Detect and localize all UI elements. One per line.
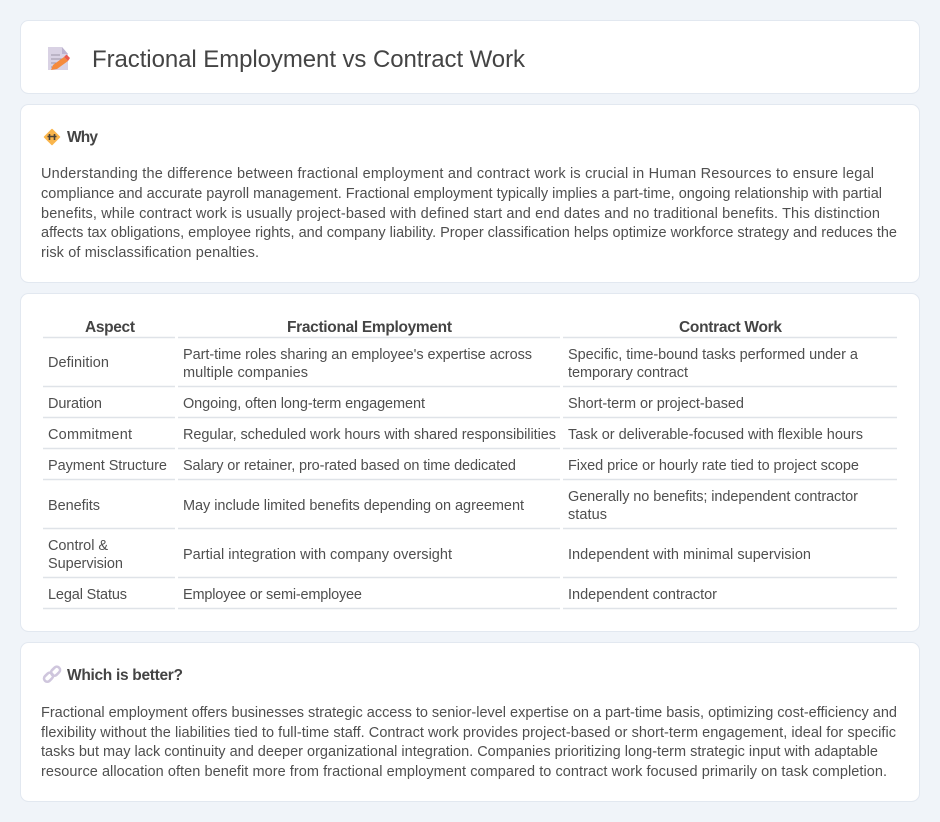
panel: header xyxy=(20,20,920,94)
title: Fractional Employment vs Contract Work xyxy=(92,46,526,73)
row: control and supervision xyxy=(43,538,897,578)
icon: document with pencil xyxy=(48,47,70,70)
table header row: Fractional Employment xyxy=(287,319,452,336)
table header row: Aspect xyxy=(85,319,135,336)
text block: why paragraph: affects tax obligations, employee rights, and company liability. Proper classification helps optimize workforce strategy and reduces the xyxy=(41,225,897,241)
row: definition: multiple companies xyxy=(183,365,308,381)
panel: comparison table xyxy=(20,294,920,632)
row: definition xyxy=(43,347,897,386)
row: benefits: May include limited benefits depending on agreement xyxy=(183,498,524,514)
row: payment structure: Payment Structure xyxy=(48,458,167,474)
row: definition: Definition xyxy=(48,355,109,371)
row: duration xyxy=(43,396,897,418)
row: commitment: Regular, scheduled work hours with shared responsibilities xyxy=(183,427,556,443)
row: definition: Part-time roles sharing an employee's expertise across xyxy=(183,347,532,363)
text block: which is better paragraph: tasks but may lack continuity and deeper organizational integration. Companies prioritizing long-term strategic input with adaptable xyxy=(41,744,878,760)
table header row: Contract Work xyxy=(679,319,782,336)
heading: which is better: Which is better? xyxy=(67,667,183,684)
text block: why paragraph: Understanding the difference between fractional employment and contract work is crucial in Human Resources to ensure legal xyxy=(41,166,874,182)
row: payment structure: Fixed price or hourly rate tied to project scope xyxy=(568,458,859,474)
heading: why: Why xyxy=(67,129,98,146)
row: commitment xyxy=(43,427,897,448)
row: control and supervision: Partial integration with company oversight xyxy=(183,547,452,563)
row: control and supervision: Independent with minimal supervision xyxy=(568,547,811,563)
row: control and supervision: Supervision xyxy=(48,556,123,572)
row: definition: Specific, time-bound tasks performed under a xyxy=(568,347,859,363)
row: benefits: Generally no benefits; independent contractor xyxy=(568,489,858,505)
table header row xyxy=(43,319,897,338)
text block: why paragraph: benefits, while contract work is usually project-based with defined start and end dates and no traditional benefits. This distinction xyxy=(41,206,880,222)
row: duration: Short-term or project-based xyxy=(568,396,744,412)
row: payment structure: Salary or retainer, pro-rated based on time dedicated xyxy=(183,458,516,474)
row: benefits xyxy=(43,489,897,528)
row: commitment: Task or deliverable-focused with flexible hours xyxy=(568,427,863,443)
panel: why xyxy=(20,104,920,282)
icon: warning diamond xyxy=(44,130,60,144)
text block: which is better paragraph: Fractional employment offers businesses strategic access to senior-level expertise on a part-time basis, optimizing cost-efficiency and xyxy=(41,705,897,721)
row: legal status: Independent contractor xyxy=(568,587,717,603)
panel: which is better xyxy=(20,642,920,802)
row: legal status xyxy=(43,587,897,608)
row: legal status: Employee or semi-employee xyxy=(183,587,362,603)
row: duration: Ongoing, often long-term engagement xyxy=(183,396,425,412)
row: commitment: Commitment xyxy=(48,427,132,443)
text block: which is better paragraph: resource allocation often benefit more from fractional employment compared to contract work focused primarily on task completion. xyxy=(41,764,887,780)
text block: which is better paragraph: flexibility without the liabilities tied to full-time staff. Contract work provides project-based or short-term engagement, ideal for specific xyxy=(41,725,896,741)
text block: why paragraph xyxy=(41,166,897,261)
icon: link xyxy=(43,665,61,683)
row: payment structure xyxy=(43,458,897,480)
text block: why paragraph: compliance and accurate payroll management. Fractional employment typically implies a part-time, ongoing relationship with partial xyxy=(41,186,882,202)
row: definition: temporary contract xyxy=(568,365,688,381)
text block: which is better paragraph xyxy=(41,705,897,780)
row: control and supervision: Control & xyxy=(48,538,108,554)
row: benefits: status xyxy=(568,507,607,523)
row: duration: Duration xyxy=(48,396,102,412)
text block: why paragraph: risk of misclassification penalties. xyxy=(41,245,259,261)
row: legal status: Legal Status xyxy=(48,587,127,603)
row: benefits: Benefits xyxy=(48,498,100,514)
